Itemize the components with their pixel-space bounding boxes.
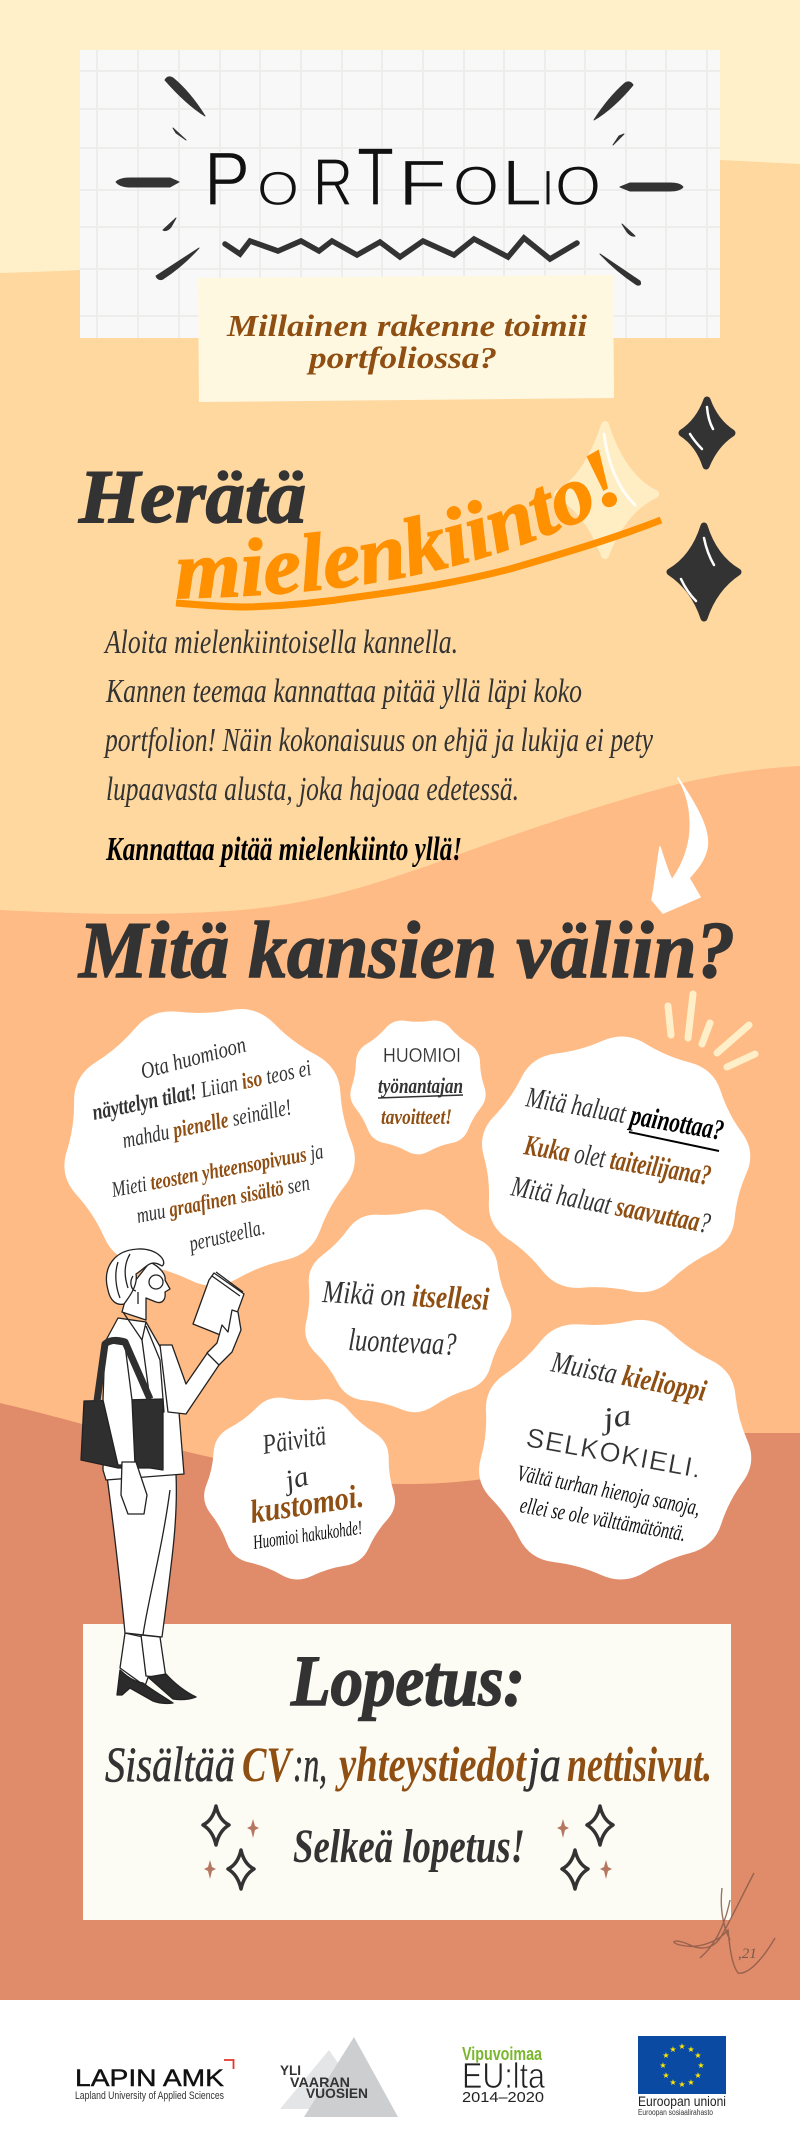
- icon: dark sparkle bottom: [670, 526, 738, 618]
- icon: dark sparkle top: [682, 400, 732, 466]
- subtitle box: Millainen rakenne toimii: [226, 308, 587, 343]
- logo: Yli vaaran vuosien: VAARAN: [290, 2074, 350, 2090]
- bubble: huomioi työnantajan tavoitteet: tavoitteet!: [381, 1104, 452, 1129]
- bubble: mitä haluat painottaa: Mitä haluat saavuttaa?: [508, 1170, 713, 1240]
- book: [193, 1273, 244, 1338]
- logo: European Union flag: Euroopan sosiaalirahasto: [638, 2108, 713, 2117]
- icon: stars: ★: [678, 2042, 686, 2051]
- bubble: päivitä ja kustomoi: kustomoi.: [248, 1478, 366, 1531]
- arrow: white curved: [652, 778, 707, 913]
- icon: stars: ★: [662, 2051, 670, 2060]
- icon: stars: ★: [659, 2061, 667, 2070]
- text: sisältää: [105, 1736, 712, 1792]
- bag: [81, 1399, 163, 1470]
- logo: Yli vaaran vuosien: VUOSIEN: [306, 2085, 368, 2101]
- text block: intro: Kannen teemaa kannattaa pitää yllä läpi koko: [105, 673, 582, 710]
- strap: [97, 1340, 150, 1401]
- icon: burst rays around title: [116, 77, 683, 285]
- bubble: näyttelyn tilat: muu graafinen sisältö sen: [134, 1170, 312, 1228]
- heading: Herätä: Herätä: [78, 455, 306, 539]
- logo: Vipuvoimaa EU:lta: EU:lta: [462, 2055, 546, 2096]
- illustration: person reading: [81, 1249, 244, 1703]
- logo: Vipuvoimaa EU:lta: Vipuvoimaa: [462, 2044, 543, 2064]
- bubble: huomioi työnantajan tavoitteet: HUOMIOI: [383, 1045, 461, 1067]
- text block: intro: [103, 624, 654, 868]
- icon: stars: ★: [687, 2045, 695, 2054]
- title: [204, 130, 601, 223]
- text: sisältää: ja: [523, 1736, 561, 1792]
- heading: mielenkiinto curved: mielenkiinto!: [176, 450, 617, 599]
- bubble: muista kielioppi ja selkokieli: ellei se ole välttämätöntä.: [518, 1492, 688, 1546]
- text: sisältää: nettisivut.: [567, 1736, 712, 1792]
- zigzag line: [225, 238, 577, 259]
- bubble: mikä on itsellesi luontevaa: Mikä on itsellesi: [321, 1273, 490, 1317]
- bubble: näyttelyn tilat: mahdu pienelle seinälle!: [120, 1094, 294, 1153]
- bubble: muista kielioppi ja selkokieli: Muista kielioppi: [548, 1345, 710, 1408]
- trousers: [107, 1474, 176, 1637]
- raised arm: [160, 1345, 219, 1414]
- bubble: näyttelyn tilat: [49, 988, 375, 1303]
- panel: lopetus: [83, 1624, 731, 1920]
- bubble: päivitä ja kustomoi: [190, 1379, 414, 1596]
- heading: Mitä kansien väliin: Mitä kansien väliin?: [77, 907, 735, 995]
- title: P: [204, 137, 250, 222]
- text block: intro: Kannattaa pitää mielenkiinto yllä!: [105, 831, 462, 868]
- glasses: [149, 1275, 163, 1289]
- logo: Yli vaaran vuosien: YLI: [280, 2062, 301, 2078]
- text: sisältää: Sisältää: [105, 1736, 235, 1792]
- text block: intro: lupaavasta alusta, joka hajoaa edetessä.: [106, 771, 519, 808]
- ear and earring: [131, 1276, 138, 1304]
- left hand: [121, 1462, 147, 1514]
- bubble: huomioi työnantajan tavoitteet: työnantajan: [378, 1073, 463, 1098]
- icon: stars: ★: [697, 2061, 705, 2070]
- shoes: [148, 1674, 196, 1700]
- icon: stars: ★: [669, 2078, 677, 2087]
- title: T: [357, 130, 394, 223]
- logo: European Union flag: [638, 2036, 726, 2117]
- icon: stars: [659, 2042, 705, 2089]
- bubble: näyttelyn tilat: perusteella.: [185, 1214, 267, 1256]
- title: R: [313, 145, 353, 220]
- signature: [674, 1873, 775, 1973]
- logo: Vipuvoimaa EU:lta: 2014–2020: [462, 2089, 544, 2106]
- bubble: muista kielioppi ja selkokieli: [468, 1305, 765, 1591]
- icon: stars: ★: [694, 2071, 702, 2080]
- logo: Lapin AMK: LAPIN AMK: [75, 2065, 224, 2092]
- logo: Yli vaaran vuosien: [280, 2037, 398, 2117]
- legs and ankles: [120, 1633, 150, 1686]
- torso: [103, 1318, 184, 1480]
- bubble: mikä on itsellesi luontevaa: [300, 1202, 519, 1418]
- icon: stars: ★: [662, 2071, 670, 2080]
- subtitle box: portfoliossa?: [306, 340, 497, 375]
- title: O: [555, 154, 601, 217]
- bubble: mitä haluat painottaa: Kuka olet taiteilijana?: [521, 1129, 714, 1192]
- text: sisältää: yhteystiedot: [335, 1736, 528, 1792]
- text: selkeä lopetus: Selkeä lopetus!: [293, 1820, 525, 1873]
- icon: stars: ★: [669, 2045, 677, 2054]
- left arm: [103, 1342, 135, 1465]
- bubble: muista kielioppi ja selkokieli: SELKOKIELI.: [524, 1422, 703, 1484]
- icon: faded sparkle: [558, 425, 655, 555]
- heading: Lopetus: Lopetus:: [290, 1641, 525, 1721]
- bubble: päivitä ja kustomoi: Päivitä: [259, 1420, 328, 1461]
- title: O: [257, 163, 299, 216]
- title: O: [453, 154, 499, 217]
- bubble: näyttelyn tilat: Ota huomioon: [138, 1032, 249, 1084]
- bubble: huomioi työnantajan tavoitteet: [342, 1008, 497, 1165]
- title: I: [542, 160, 554, 216]
- text block: intro: Aloita mielenkiintoisella kannella.: [103, 624, 458, 661]
- text: sisältää: :n,: [293, 1736, 327, 1792]
- bubble: mitä haluat painottaa: Mitä haluat painottaa?: [523, 1081, 726, 1147]
- bubble: päivitä ja kustomoi: Huomioi hakukohde!: [251, 1517, 364, 1554]
- signature year: ,21: [738, 1946, 757, 1962]
- bubble: mikä on itsellesi luontevaa: luontevaa?: [348, 1321, 457, 1362]
- bubble: muista kielioppi ja selkokieli: ja: [596, 1399, 634, 1437]
- neck and face: [122, 1262, 170, 1320]
- hair: [106, 1249, 164, 1304]
- right hand: [207, 1310, 241, 1365]
- icon: small pink sparkles: [204, 1819, 612, 1879]
- icon: outline sparkles: [203, 1806, 613, 1889]
- logo: Vipuvoimaa EU:lta: [462, 2044, 546, 2106]
- logo: Lapin AMK: [75, 2060, 234, 2102]
- icon: stars: ★: [678, 2080, 686, 2089]
- logo: European Union flag: Euroopan unioni: [638, 2093, 726, 2109]
- text: sisältää: CV: [242, 1736, 294, 1792]
- bubble: muista kielioppi ja selkokieli: Vältä turhan hienoja sanoja,: [515, 1460, 702, 1520]
- icon: stars: ★: [694, 2051, 702, 2060]
- bubble: mitä haluat painottaa: [472, 1025, 764, 1307]
- icon: stars: ★: [687, 2078, 695, 2087]
- panel: grid paper title card: [80, 50, 720, 338]
- icon: rays near bubble: [668, 994, 755, 1067]
- bubble: näyttelyn tilat: Mieti teosten yhteensopivuus ja: [109, 1138, 325, 1202]
- bubble: näyttelyn tilat: näyttelyn tilat! Liian iso teos ei: [90, 1055, 313, 1125]
- logo: Lapin AMK: Lapland University of Applied Sciences: [75, 2090, 224, 2102]
- bubble: päivitä ja kustomoi: ja: [279, 1461, 312, 1498]
- title: L: [502, 146, 542, 219]
- title: F: [398, 146, 447, 219]
- subtitle box: [198, 275, 614, 402]
